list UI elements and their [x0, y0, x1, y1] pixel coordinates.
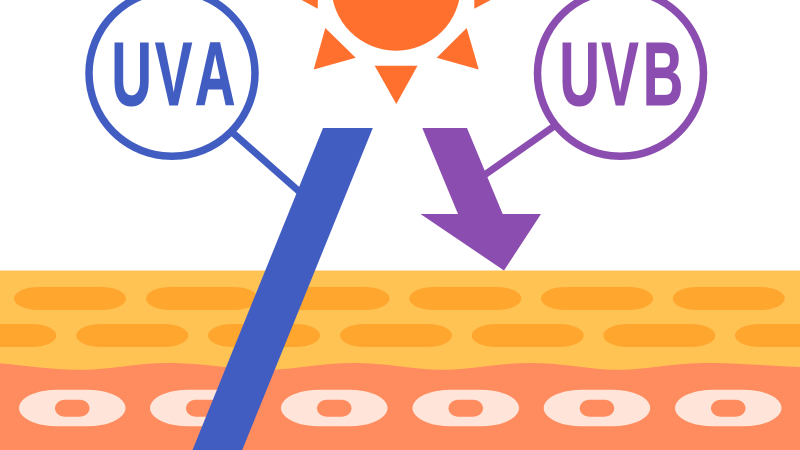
UVA ray	[192, 128, 373, 450]
dermis cell nuclei	[55, 400, 746, 417]
dermis cells	[19, 390, 782, 426]
icon: sun	[302, 0, 491, 104]
UVA label circle: UVA	[111, 23, 235, 124]
UVB label circle	[538, 0, 704, 156]
UVB arrow	[420, 128, 541, 270]
epidermis cells, row 2	[0, 324, 800, 347]
skin layer: dermis	[0, 363, 800, 450]
UVB label circle: UVB	[559, 23, 683, 124]
UVA label circle	[89, 0, 255, 156]
skin layer: epidermis	[0, 270, 800, 376]
UVA connector line	[233, 133, 302, 194]
UVB connector line	[483, 127, 553, 176]
epidermis cells, row 1	[14, 287, 785, 310]
